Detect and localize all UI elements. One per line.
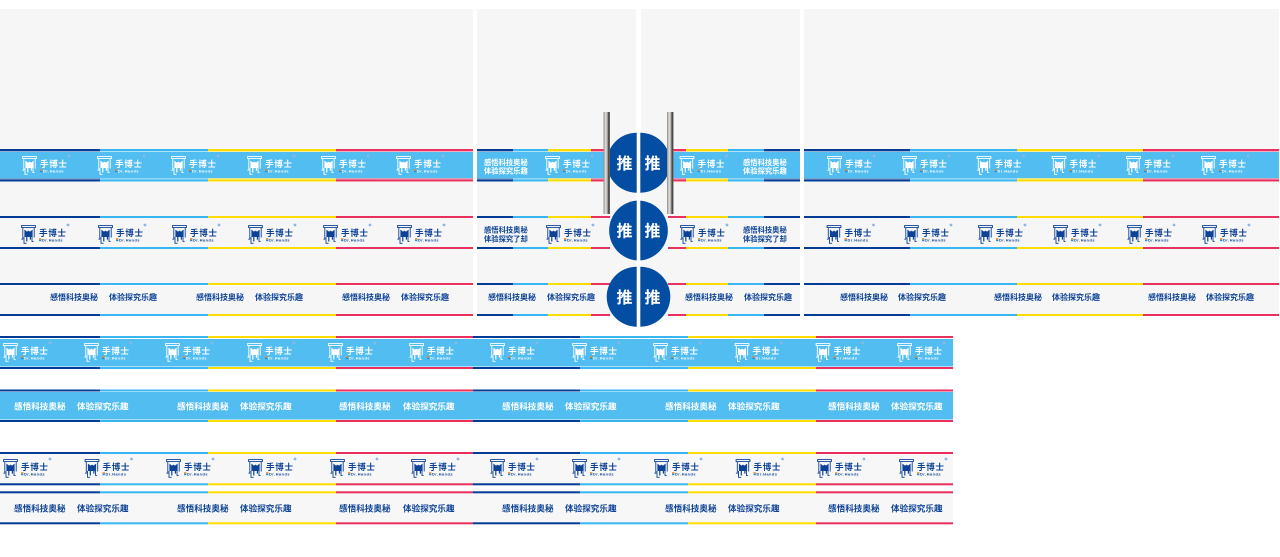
strip: lower blue slogan band: 体验探究乐趣 <box>565 400 617 412</box>
push sign: middle: 推 <box>644 222 661 240</box>
door logos <box>545 155 728 174</box>
logo row: 手博士 <box>346 345 374 356</box>
strip: lower grey slogan band: 感悟科技奥秘 <box>502 502 554 514</box>
strip: lower grey slogan band: 体验探究乐趣 <box>240 502 292 514</box>
push sign: bottom: 推 <box>644 289 661 307</box>
logo row: 手博士 <box>21 461 49 472</box>
logo row: 手博士 <box>102 345 130 356</box>
logo row: 手博士 <box>994 158 1022 169</box>
strip: lower blue slogan band: 感悟科技奥秘 <box>828 400 880 412</box>
logo row: Dr.Hands <box>268 356 289 360</box>
strip: lower blue slogan band: 感悟科技奥秘 <box>177 400 229 412</box>
door text right <box>743 226 787 243</box>
logo row: Dr.Hands <box>998 169 1019 173</box>
door logos: 手博士 <box>698 227 726 238</box>
door text right <box>743 158 787 176</box>
logo row: Dr.Hands <box>268 169 289 173</box>
push sign: bottom: 推 <box>616 289 633 307</box>
strip: door slogan band: 感悟科技奥秘 <box>685 292 733 302</box>
push sign: top <box>607 133 670 193</box>
logo row: Dr.Hands <box>675 472 696 476</box>
strip: upper right slogan band <box>804 283 1279 316</box>
logo row: 手博士 <box>39 227 67 238</box>
logo row: Dr.Hands <box>1223 238 1244 242</box>
logo row: Dr.Hands <box>106 472 127 476</box>
door handle: left <box>604 112 610 214</box>
logo row: 手博士 <box>835 461 863 472</box>
logo row: Dr.Hands <box>756 356 777 360</box>
strip: lower grey slogan band: 体验探究乐趣 <box>77 502 129 514</box>
logo row: Dr.Hands <box>24 472 45 476</box>
logo row: Dr.Hands <box>511 472 532 476</box>
door logos: Dr.Hands <box>566 169 587 173</box>
push sign: bottom <box>607 267 670 327</box>
logo row: Dr.Hands <box>848 238 869 242</box>
logo row: Dr.Hands <box>1148 238 1169 242</box>
strip: lower blue slogan band: 体验探究乐趣 <box>728 400 780 412</box>
logo row: 手博士 <box>184 461 212 472</box>
strip: upper left slogan band: 感悟科技奥秘 <box>50 292 98 302</box>
logo row: 手博士 <box>21 345 49 356</box>
logo row: 手博士 <box>845 158 873 169</box>
logo row: 手博士 <box>116 227 144 238</box>
logo row: 手博士 <box>1220 227 1248 238</box>
logo row: 手博士 <box>415 227 443 238</box>
logo row: 手博士 <box>996 227 1024 238</box>
logo row: 手博士 <box>339 158 367 169</box>
push sign: middle <box>609 201 668 260</box>
logo row: 手博士 <box>427 345 455 356</box>
logo row: Dr.Hands <box>1147 169 1168 173</box>
door text right: 感悟科技奥秘 <box>743 226 787 235</box>
logo row: Dr.Hands <box>674 356 695 360</box>
logo row: Dr.Hands <box>186 356 207 360</box>
strip: lower grey slogan band: 体验探究乐趣 <box>728 502 780 514</box>
panel: left door <box>477 9 636 316</box>
logo row: 手博士 <box>1070 158 1097 169</box>
logo row: Dr.Hands <box>430 356 451 360</box>
logo row <box>827 155 1249 174</box>
logo row: Dr.Hands <box>342 169 363 173</box>
door text left: 感悟科技奥秘 <box>484 158 528 167</box>
strip: lower blue slogan band: 感悟科技奥秘 <box>14 400 66 412</box>
logo row: 手博士 <box>920 158 948 169</box>
door text left: 感悟科技奥秘 <box>484 226 528 235</box>
logo row: Dr.Hands <box>836 356 858 360</box>
door text right: 体验探究乐趣 <box>743 166 787 176</box>
logo row <box>3 458 947 477</box>
door text right: 体验探究了却 <box>743 234 787 243</box>
strip: lower blue slogan band <box>0 390 953 422</box>
strip: upper right slogan band: 体验探究乐趣 <box>898 292 946 302</box>
strip: lower grey slogan band: 体验探究乐趣 <box>403 502 455 514</box>
door logos: Dr.Hands <box>567 238 588 242</box>
strip: lower blue slogan band: 感悟科技奥秘 <box>502 400 554 412</box>
logo row: Dr.Hands <box>417 169 438 173</box>
strip: door slogan band: 体验探究乐趣 <box>744 292 792 302</box>
logo row: Dr.Hands <box>848 169 869 173</box>
door text left: 体验探究乐趣 <box>484 166 528 176</box>
logo row: Dr.Hands <box>193 238 214 242</box>
strip: upper right slogan band: 体验探究乐趣 <box>1052 292 1100 302</box>
logo row: 手博士 <box>844 227 872 238</box>
door logos: 手博士 <box>563 158 591 169</box>
logo row: Dr.Hands <box>1072 169 1094 173</box>
logo row: 手博士 <box>922 227 950 238</box>
strip: upper left slogan band: 体验探究乐趣 <box>401 292 449 302</box>
logo row: Dr.Hands <box>923 169 944 173</box>
logo row: Dr.Hands <box>119 238 140 242</box>
strip: upper right blue logo band <box>804 149 1279 182</box>
strip: upper right slogan band: 感悟科技奥秘 <box>994 292 1042 302</box>
door logos <box>546 224 728 243</box>
strip: lower grey slogan band: 感悟科技奥秘 <box>339 502 391 514</box>
door logos: 手博士 <box>698 158 725 169</box>
strip: lower grey slogan band <box>0 491 953 524</box>
push sign: top: 推 <box>644 155 661 173</box>
logo row: Dr.Hands <box>344 238 365 242</box>
logo row: 手博士 <box>1145 227 1173 238</box>
logo row: 手博士 <box>508 461 536 472</box>
strip: lower blue slogan band: 感悟科技奥秘 <box>665 400 717 412</box>
logo row: Dr.Hands <box>432 472 453 476</box>
logo row: 手博士 <box>189 158 217 169</box>
strip: door navy logo band <box>477 216 800 249</box>
logo row: Dr.Hands <box>418 238 439 242</box>
logo row: 手博士 <box>1071 227 1099 238</box>
strip: lower blue logo band <box>0 336 953 369</box>
panel: upper left wall <box>0 9 473 316</box>
logo row: Dr.Hands <box>511 356 532 360</box>
logo row: 手博士 <box>348 461 376 472</box>
strip: door blue band <box>477 149 800 182</box>
logo row: 手博士 <box>265 345 293 356</box>
door text right: 感悟科技奥秘 <box>743 158 787 167</box>
logo row: Dr.Hands <box>593 356 614 360</box>
logo row: Dr.Hands <box>756 472 778 476</box>
logo row: Dr.Hands <box>269 472 290 476</box>
logo row: Dr.Hands <box>42 238 63 242</box>
logo row: Dr.Hands <box>105 356 126 360</box>
logo row: Dr.Hands <box>192 169 213 173</box>
strip: lower grey slogan band: 感悟科技奥秘 <box>828 502 880 514</box>
logo row: 手博士 <box>266 227 294 238</box>
logo row: Dr.Hands <box>1222 169 1243 173</box>
strip: upper right slogan band: 体验探究乐趣 <box>1206 292 1254 302</box>
logo row: Dr.Hands <box>1074 238 1095 242</box>
strip: lower blue slogan band: 体验探究乐趣 <box>77 400 129 412</box>
strip: upper right navy logo band <box>804 216 1279 249</box>
logo row: Dr.Hands <box>593 472 614 476</box>
logo row: 手博士 <box>752 345 780 356</box>
strip: lower grey slogan band: 体验探究乐趣 <box>565 502 617 514</box>
strip: door slogan band <box>477 283 800 316</box>
door handle: right <box>667 112 674 214</box>
strip: upper left blue logo band <box>0 149 473 182</box>
logo row: Dr.Hands <box>838 472 859 476</box>
strip: lower blue slogan band: 感悟科技奥秘 <box>339 400 391 412</box>
strip: upper left navy logo band <box>0 216 473 249</box>
panel: upper right wall <box>804 9 1279 316</box>
logo row: 手博士 <box>834 345 861 356</box>
logo row: 手博士 <box>1144 158 1172 169</box>
logo row: 手博士 <box>754 461 781 472</box>
logo row: 手博士 <box>102 461 130 472</box>
strip: upper left slogan band: 体验探究乐趣 <box>109 292 157 302</box>
logo row: 手博士 <box>266 461 294 472</box>
strip: upper right slogan band: 感悟科技奥秘 <box>1148 292 1196 302</box>
logo row: Dr.Hands <box>269 238 290 242</box>
strip: upper left slogan band: 感悟科技奥秘 <box>342 292 390 302</box>
strip: lower grey slogan band: 体验探究乐趣 <box>891 502 943 514</box>
logo row <box>827 224 1250 243</box>
panel: right door <box>641 9 800 316</box>
strip: upper right slogan band: 感悟科技奥秘 <box>840 292 888 302</box>
logo row: 手博士 <box>508 345 536 356</box>
logo row: Dr.Hands <box>43 169 64 173</box>
strip: upper left slogan band: 体验探究乐趣 <box>255 292 303 302</box>
logo row: Dr.Hands <box>118 169 139 173</box>
logo row: 手博士 <box>590 461 618 472</box>
logo row: Dr.Hands <box>999 238 1020 242</box>
strip: lower blue slogan band: 体验探究乐趣 <box>891 400 943 412</box>
logo row: 手博士 <box>115 158 143 169</box>
push sign: middle: 推 <box>616 222 633 240</box>
strip: lower blue slogan band: 体验探究乐趣 <box>403 400 455 412</box>
strip: lower grey slogan band: 感悟科技奥秘 <box>177 502 229 514</box>
push sign: top: 推 <box>616 155 633 173</box>
strip: upper left slogan band: 感悟科技奥秘 <box>196 292 244 302</box>
strip: lower grey slogan band: 感悟科技奥秘 <box>665 502 717 514</box>
logo row: Dr.Hands <box>918 356 939 360</box>
logo row <box>3 342 945 361</box>
logo row: 手博士 <box>672 461 700 472</box>
logo row: 手博士 <box>183 345 211 356</box>
logo row: 手博士 <box>414 158 442 169</box>
logo row: 手博士 <box>265 158 293 169</box>
door text left <box>484 226 528 243</box>
strip: door slogan band: 感悟科技奥秘 <box>488 292 536 302</box>
door text left: 体验探究了却 <box>484 234 528 243</box>
logo row: Dr.Hands <box>925 238 946 242</box>
logo row: Dr.Hands <box>920 472 941 476</box>
strip: door slogan band: 体验探究乐趣 <box>547 292 595 302</box>
logo row: 手博士 <box>40 158 68 169</box>
logo row <box>22 155 444 174</box>
logo row: 手博士 <box>190 227 218 238</box>
door logos: Dr.Hands <box>701 238 722 242</box>
logo row: 手博士 <box>341 227 369 238</box>
strip: upper left slogan band <box>0 283 473 316</box>
logo row: 手博士 <box>917 461 945 472</box>
strip: lower grey slogan band: 感悟科技奥秘 <box>14 502 66 514</box>
strip: lower blue slogan band: 体验探究乐趣 <box>240 400 292 412</box>
logo row: Dr.Hands <box>351 472 372 476</box>
logo row: Dr.Hands <box>187 472 208 476</box>
logo row: 手博士 <box>590 345 618 356</box>
logo row: 手博士 <box>429 461 457 472</box>
door logos: Dr.Hands <box>700 169 722 173</box>
logo row: 手博士 <box>671 345 699 356</box>
logo row: Dr.Hands <box>349 356 370 360</box>
logo row: Dr.Hands <box>24 356 45 360</box>
strip: lower grey logo band <box>0 452 953 485</box>
logo row <box>21 224 445 243</box>
logo row: 手博士 <box>915 345 943 356</box>
door logos: 手博士 <box>564 227 592 238</box>
logo row: 手博士 <box>1219 158 1247 169</box>
door text left <box>484 158 528 176</box>
